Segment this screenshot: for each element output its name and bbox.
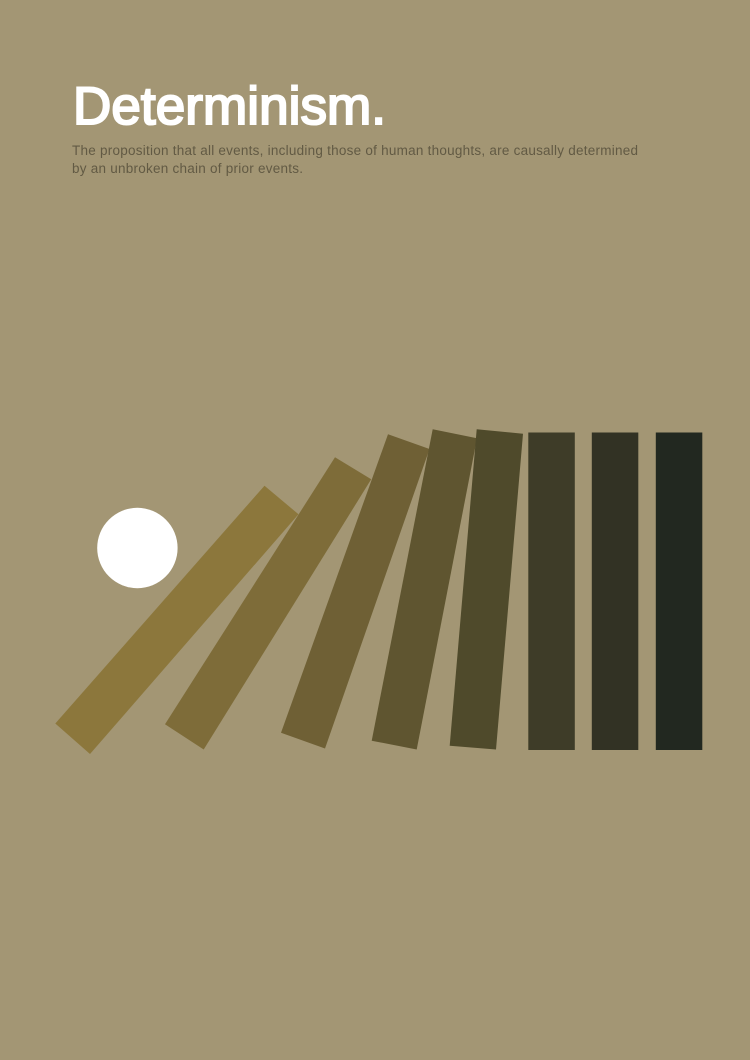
- domino 1: most fallen: [55, 486, 298, 754]
- domino 2: [165, 457, 371, 750]
- description text: by an unbroken chain of prior events.: [72, 161, 303, 176]
- icon: white ball: [97, 508, 178, 588]
- domino 4: [372, 429, 477, 750]
- title: Determinism.: [73, 77, 386, 136]
- domino 5: [450, 429, 523, 750]
- domino 8: upright: [656, 432, 702, 750]
- domino chain: [55, 429, 702, 754]
- domino 6: upright: [528, 432, 575, 750]
- domino 3: [281, 434, 430, 748]
- domino 7: upright: [592, 432, 638, 750]
- description text: The proposition that all events, including those of human thoughts, are causally determined: [72, 143, 638, 158]
- description text: [72, 143, 638, 176]
